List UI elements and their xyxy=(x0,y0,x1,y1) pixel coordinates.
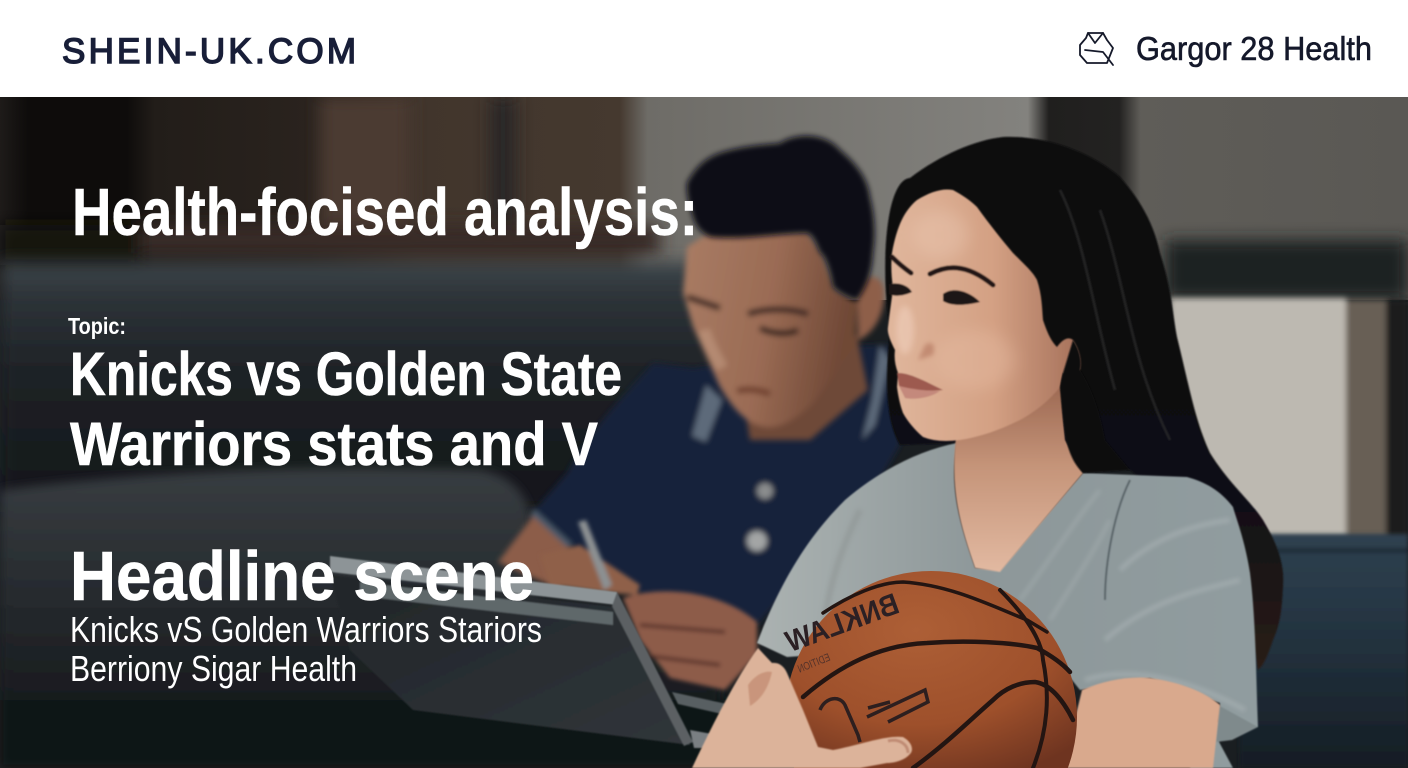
brand name: Gargor 28 Health xyxy=(1136,30,1372,67)
ball brand text: BNKLAW xyxy=(781,588,903,659)
woman's neck xyxy=(954,380,1083,572)
woman's face xyxy=(888,189,1081,441)
ball logo xyxy=(820,690,928,742)
man's hands and pen xyxy=(540,520,757,690)
polo collar xyxy=(692,385,722,442)
site name: SHEIN-UK.COM xyxy=(62,32,356,71)
man's torso and shirt xyxy=(498,345,900,625)
topic title: Knicks vs Golden State xyxy=(70,340,622,408)
ball small text: EDITION xyxy=(796,652,832,676)
white cushion xyxy=(1170,298,1408,540)
headline scene subtext xyxy=(70,609,542,689)
woman's right arm xyxy=(1063,678,1220,768)
right sofa xyxy=(1240,534,1408,768)
topic title xyxy=(70,340,622,478)
front sofa xyxy=(0,468,760,768)
man's hair xyxy=(687,136,875,300)
topic title: Warriors stats and V xyxy=(70,410,598,478)
headline scene subtext: Knicks vS Golden Warriors Stariors xyxy=(70,609,542,650)
headline scene subtext: Berriony Sigar Health xyxy=(70,648,357,689)
icon: logo mark xyxy=(1080,33,1113,65)
woman's hair, back xyxy=(885,137,1283,670)
woman's front hair xyxy=(1060,190,1170,473)
header bar xyxy=(0,0,1408,97)
man's neck, head xyxy=(683,232,884,440)
logo: Gargor 28 Health xyxy=(1080,30,1372,67)
main heading: Health-focised analysis: xyxy=(72,175,698,250)
topic label: Topic: xyxy=(68,313,126,339)
basketball xyxy=(781,571,1077,768)
woman's t-shirt xyxy=(757,443,1258,768)
man in navy polo xyxy=(498,136,900,625)
back sofa xyxy=(0,240,1408,512)
headline block xyxy=(68,175,698,689)
ball seams xyxy=(803,582,1073,768)
laptop xyxy=(330,556,727,748)
woman's hand and forearm xyxy=(692,648,912,768)
woman's eyebrows, eyes, lips xyxy=(892,257,993,285)
woman xyxy=(692,137,1283,768)
headline scene heading: Headline scene xyxy=(70,537,534,615)
